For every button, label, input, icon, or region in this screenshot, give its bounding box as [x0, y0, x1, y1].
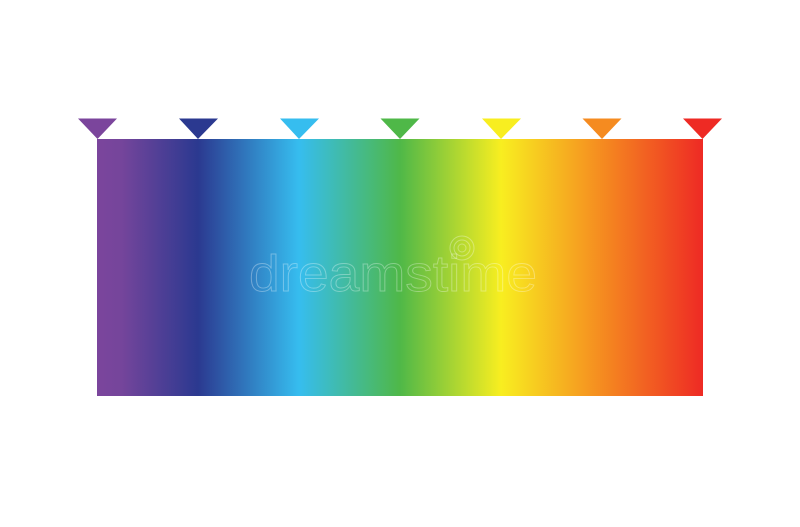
- marker: green: [380, 118, 420, 139]
- watermark text: dreamstime: [249, 245, 537, 302]
- marker: orange: [582, 118, 622, 139]
- marker: indigo: [179, 118, 218, 139]
- watermark: [249, 236, 537, 302]
- marker: red: [683, 118, 722, 139]
- spectrum bar: [97, 139, 703, 396]
- marker: blue: [280, 118, 319, 139]
- marker: violet: [78, 118, 117, 139]
- watermark spiral: [450, 236, 474, 260]
- marker: yellow: [482, 118, 521, 139]
